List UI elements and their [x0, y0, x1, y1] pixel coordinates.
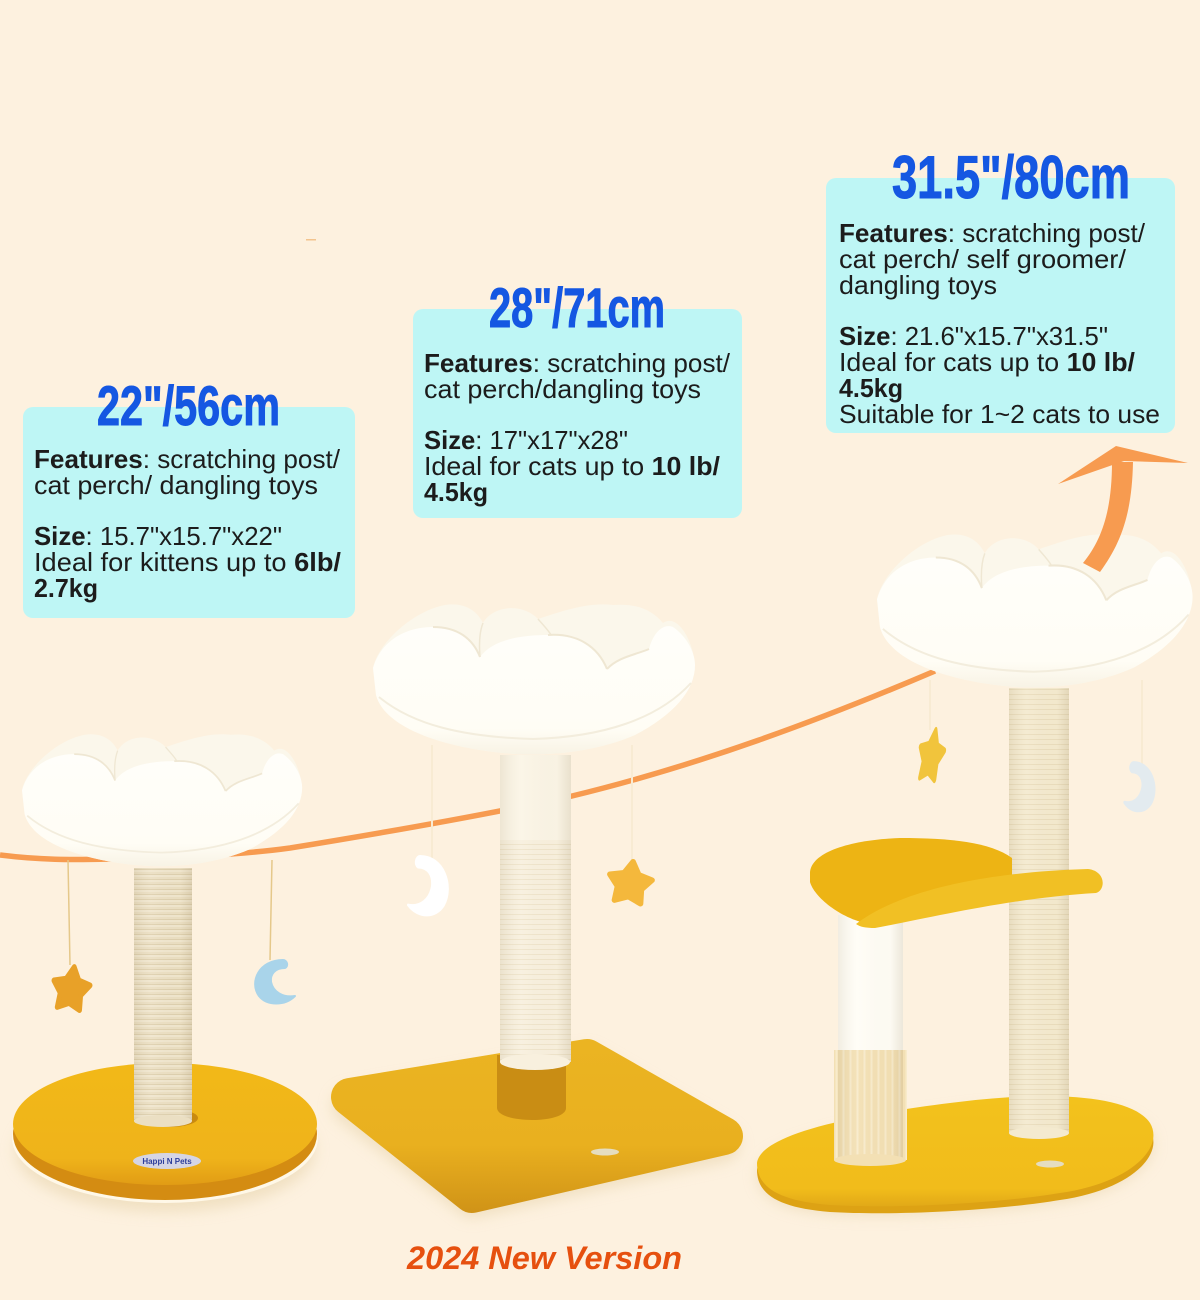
cat tree: tall two-level: [757, 534, 1193, 1215]
brand tag: [1036, 1160, 1064, 1168]
features and size text: cat perch/dangling toys: [424, 374, 701, 404]
features and size text: Ideal for cats up to 10 lb/: [839, 347, 1135, 377]
features and size text: cat perch/ dangling toys: [34, 470, 318, 500]
heading: 28 inch size: 28"/71cm: [489, 276, 665, 339]
features and size text: Features: scratching post/: [839, 218, 1146, 248]
brand tag: [133, 1153, 201, 1169]
growth arrow line: [0, 671, 935, 860]
cloud perch: [373, 604, 695, 754]
cloud perch: [22, 734, 302, 866]
features and size text: 4.5kg: [424, 477, 488, 507]
features and size text: Ideal for kittens up to 6lb/: [34, 547, 341, 577]
features and size text: [839, 218, 1160, 429]
icon: moon toy: [408, 856, 448, 915]
brand tag: Happi N Pets: [142, 1157, 192, 1166]
brand tag: [591, 1148, 619, 1156]
cloud perch: [877, 534, 1193, 687]
features and size text: Size: 21.6"x15.7"x31.5": [839, 321, 1108, 351]
icon: moon toy: [1124, 763, 1154, 811]
base: [757, 1096, 1153, 1215]
base: [350, 1058, 724, 1200]
features and size text: [34, 444, 341, 603]
yellow post foot: [497, 1055, 566, 1120]
features and size text: Size: 17"x17"x28": [424, 425, 628, 455]
icon: moon toy: [255, 960, 295, 1004]
toy strings: [930, 680, 1142, 765]
short post: [834, 915, 907, 1166]
growth arrow head: [1058, 446, 1188, 572]
heading: 22 inch size: 22"/56cm: [97, 374, 280, 437]
icon: star toy: [50, 964, 92, 1011]
features and size text: Features: scratching post/: [34, 444, 341, 474]
features and size text: Size: 15.7"x15.7"x22": [34, 521, 282, 551]
heading: 31.5 inch size: 31.5"/80cm: [892, 144, 1130, 211]
base: [12, 1063, 318, 1212]
tall scratching post: [1009, 688, 1069, 1139]
small orange speck: [306, 239, 316, 240]
features and size text: Features: scratching post/: [424, 348, 731, 378]
caption: 2024 new version: 2024 New Version: [406, 1240, 682, 1276]
toy strings: [432, 745, 632, 860]
features and size text: Ideal for cats up to 10 lb/: [424, 451, 720, 481]
cat tree: medium square base: [350, 604, 724, 1200]
panel: 28 inch model: [413, 276, 742, 518]
icon: star toy: [606, 859, 654, 905]
cat tree: small round base: [12, 734, 318, 1212]
features and size text: [424, 348, 731, 507]
panel: 22 inch model: [23, 374, 355, 618]
features and size text: dangling toys: [839, 270, 997, 300]
features and size text: Suitable for 1~2 cats to use: [839, 399, 1160, 429]
features and size text: cat perch/ self groomer/: [839, 244, 1127, 274]
features and size text: 2.7kg: [34, 573, 98, 603]
features and size text: 4.5kg: [839, 373, 903, 403]
toy strings: [68, 860, 272, 965]
yellow shelf: [810, 838, 1103, 928]
scratching post: [500, 755, 571, 1070]
icon: star toy: [915, 728, 948, 781]
panel: 31.5 inch model: [826, 144, 1175, 433]
scratching post: [134, 868, 192, 1127]
